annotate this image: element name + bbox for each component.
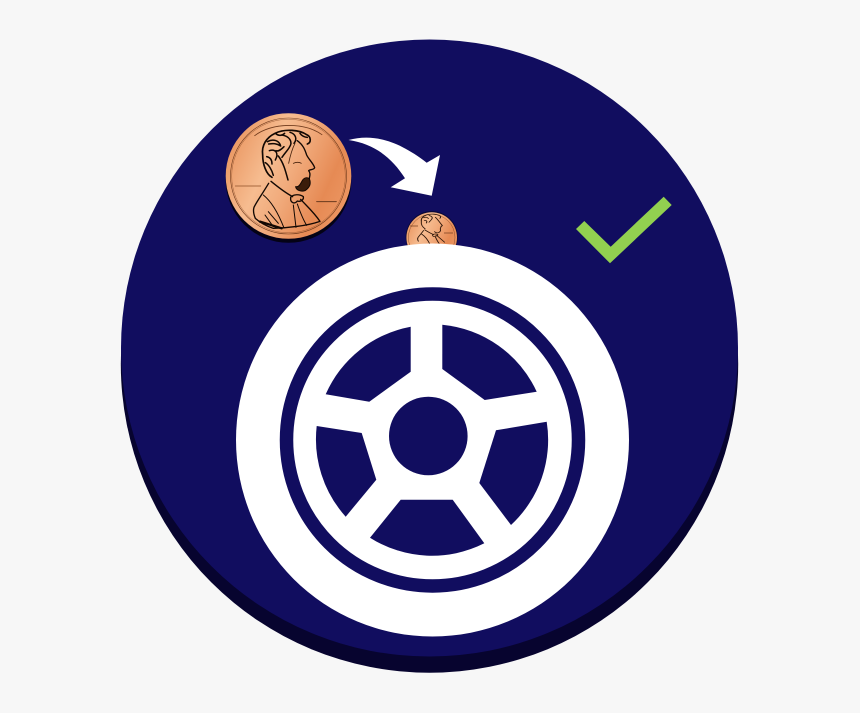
arrow: curved white arrow from large penny to small penny [348, 138, 440, 196]
icon: tire [236, 244, 629, 636]
icon: large penny [226, 113, 351, 243]
wheel: five spoke openings [316, 325, 548, 556]
Lincoln portrait [235, 125, 336, 228]
icon: green check mark [576, 197, 672, 263]
icon: small penny on the tire [406, 211, 458, 246]
tire: outer white disc [236, 244, 629, 636]
tire: navy ring [286, 294, 578, 586]
infographic: penny and tire tread icon [120, 40, 738, 673]
wheel: hub [389, 397, 468, 475]
badge: navy circle with shadow [121, 40, 738, 673]
